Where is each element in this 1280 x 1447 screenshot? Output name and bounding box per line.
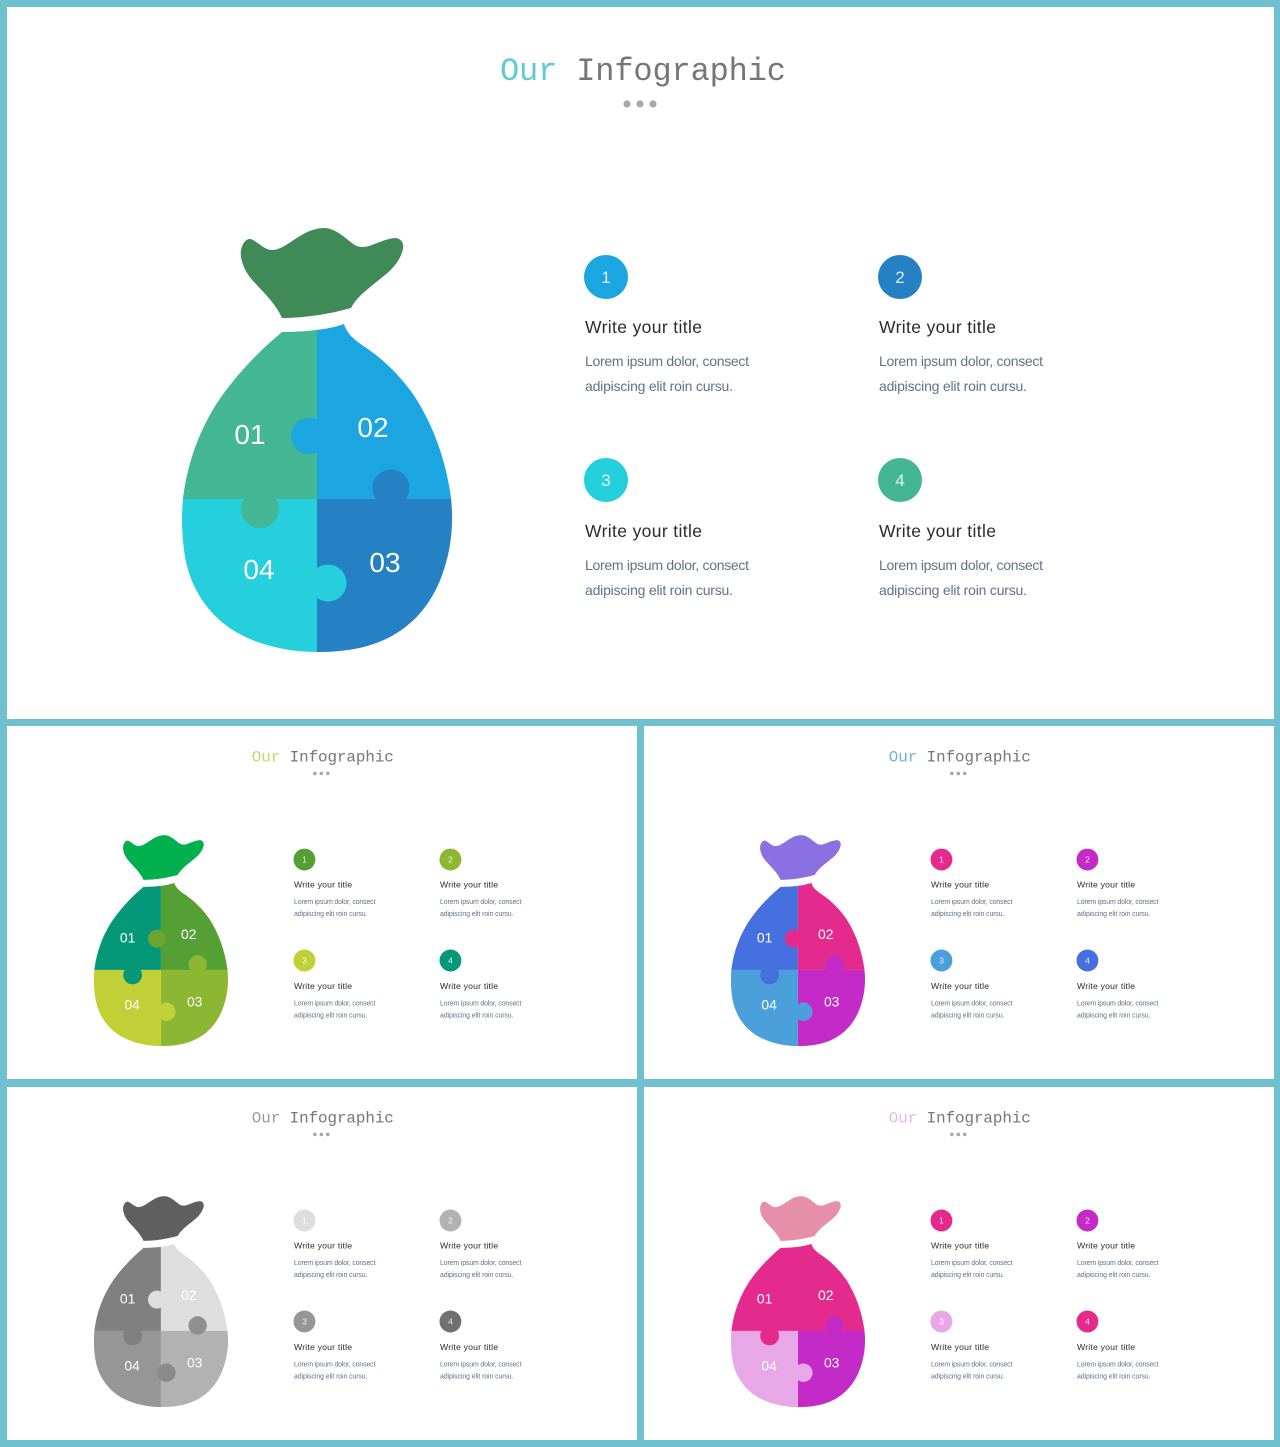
bag labels: 04 (243, 554, 275, 585)
item 2: Lorem ipsum dolor, consect (1077, 899, 1159, 906)
item 2: adipiscing elit roin cursu. (440, 911, 514, 918)
item 2: 2 (895, 268, 905, 287)
bag labels: 03 (824, 1354, 840, 1370)
item 1: Write your title (585, 317, 702, 337)
item 4: Lorem ipsum dolor, consect (440, 1361, 522, 1368)
title: Our Infographic (252, 1109, 394, 1128)
puzzle bag body (94, 883, 228, 1046)
item 1: Lorem ipsum dolor, consect (931, 1260, 1013, 1267)
item 3: Lorem ipsum dolor, consect (294, 1000, 376, 1007)
title dots (950, 772, 967, 775)
bag labels: 03 (187, 993, 203, 1009)
item 1: adipiscing elit roin cursu. (931, 911, 1005, 918)
item 3 (584, 458, 749, 598)
item 3: 3 (302, 1316, 307, 1326)
panel: purple slide (644, 726, 1274, 1079)
item 3 (931, 950, 1013, 1020)
bag labels: 02 (181, 926, 197, 942)
item 4: adipiscing elit roin cursu. (1077, 1374, 1151, 1381)
item 2: 2 (448, 1215, 453, 1225)
item 2: adipiscing elit roin cursu. (1077, 1272, 1151, 1279)
item 3: adipiscing elit roin cursu. (294, 1374, 368, 1381)
item 3: adipiscing elit roin cursu. (294, 1013, 368, 1020)
panel: main teal and blue slide (7, 7, 1274, 719)
bag labels: 03 (187, 1354, 203, 1370)
title dots (313, 1133, 330, 1136)
item 3: 3 (939, 955, 944, 965)
title: Our Infographic (500, 53, 786, 90)
item 1 (931, 1210, 1013, 1279)
item 4 (440, 950, 522, 1020)
item 4: Write your title (440, 981, 498, 991)
item 1: adipiscing elit roin cursu. (294, 1272, 368, 1279)
item 3: Write your title (931, 1342, 989, 1352)
item 3 (294, 1311, 376, 1381)
item 1: adipiscing elit roin cursu. (931, 1272, 1005, 1279)
item 4: Lorem ipsum dolor, consect (440, 1000, 522, 1007)
item 4: 4 (448, 1316, 453, 1326)
panel: green slide (7, 726, 637, 1079)
item 4: adipiscing elit roin cursu. (1077, 1013, 1151, 1020)
item 3: Lorem ipsum dolor, consect (585, 557, 749, 573)
item 2 (1077, 849, 1159, 918)
bag labels: 03 (369, 547, 401, 578)
bag labels: 01 (757, 930, 773, 946)
item 2: Lorem ipsum dolor, consect (1077, 1260, 1159, 1267)
item 1: Lorem ipsum dolor, consect (585, 353, 749, 369)
item 4: Lorem ipsum dolor, consect (1077, 1000, 1159, 1007)
item 4 (1077, 950, 1159, 1020)
item 4 (878, 458, 1043, 598)
item 4: Write your title (879, 521, 996, 541)
item 2 (440, 849, 522, 918)
item 1 (294, 1210, 376, 1279)
bag labels: 01 (757, 1291, 773, 1307)
item 3: 3 (939, 1316, 944, 1326)
bag labels: 03 (824, 993, 840, 1009)
item 4: Lorem ipsum dolor, consect (879, 557, 1043, 573)
bag labels: 01 (120, 930, 136, 946)
puzzle bag body (730, 883, 865, 1046)
item 1: Lorem ipsum dolor, consect (294, 899, 376, 906)
panel: gray slide (7, 1087, 637, 1440)
item 3 (931, 1311, 1013, 1381)
item 1: Lorem ipsum dolor, consect (294, 1260, 376, 1267)
item 2: 2 (448, 854, 453, 864)
item 1: 1 (939, 1215, 944, 1225)
bag labels: 02 (357, 412, 389, 443)
icon: bag tie (123, 835, 204, 880)
bag labels (757, 1287, 840, 1374)
item 2: Lorem ipsum dolor, consect (879, 353, 1043, 369)
item 1: 1 (939, 854, 944, 864)
item 1: adipiscing elit roin cursu. (585, 378, 733, 394)
icon: bag tie (241, 228, 403, 318)
item 3: adipiscing elit roin cursu. (931, 1013, 1005, 1020)
bag labels: 04 (761, 1358, 777, 1374)
title dots (623, 100, 657, 108)
item 2: adipiscing elit roin cursu. (879, 378, 1027, 394)
item 1: Write your title (931, 879, 989, 889)
bag labels: 02 (818, 1287, 834, 1303)
item 2: Write your title (1077, 1240, 1135, 1250)
title: Our Infographic (889, 748, 1031, 767)
item 3: adipiscing elit roin cursu. (931, 1374, 1005, 1381)
item 4: Write your title (440, 1342, 498, 1352)
title dots (950, 1133, 967, 1136)
item 3: Write your title (931, 981, 989, 991)
item 4: Write your title (1077, 981, 1135, 991)
bag labels (120, 1287, 203, 1374)
item 1: Write your title (294, 879, 352, 889)
item 3: Lorem ipsum dolor, consect (931, 1000, 1013, 1007)
bag labels: 04 (124, 997, 140, 1013)
item 2: Lorem ipsum dolor, consect (440, 1260, 522, 1267)
icon: bag tie (123, 1196, 204, 1241)
bag labels: 04 (124, 1358, 140, 1374)
item 2: Lorem ipsum dolor, consect (440, 899, 522, 906)
item 4: 4 (895, 471, 905, 490)
item 4: 4 (1085, 955, 1090, 965)
item 1: 1 (302, 854, 307, 864)
puzzle bag body (731, 1244, 865, 1408)
item 1: adipiscing elit roin cursu. (294, 911, 368, 918)
item 3: Write your title (294, 981, 352, 991)
item 4: Write your title (1077, 1342, 1135, 1352)
item 1 (294, 849, 376, 918)
item 2 (1077, 1210, 1159, 1279)
item 4: Lorem ipsum dolor, consect (1077, 1361, 1159, 1368)
item 1: Write your title (294, 1240, 352, 1250)
item 2: Write your title (440, 879, 498, 889)
panel: pink slide (644, 1087, 1274, 1440)
item 4: adipiscing elit roin cursu. (879, 582, 1027, 598)
item 1: Write your title (931, 1240, 989, 1250)
bag labels (757, 926, 840, 1013)
item 1: Lorem ipsum dolor, consect (931, 899, 1013, 906)
item 2 (440, 1210, 522, 1279)
item 1: 1 (302, 1215, 307, 1225)
item 4: adipiscing elit roin cursu. (440, 1013, 514, 1020)
item 4: adipiscing elit roin cursu. (440, 1374, 514, 1381)
item 3: Lorem ipsum dolor, consect (294, 1361, 376, 1368)
item 2: Write your title (440, 1240, 498, 1250)
item 4 (440, 1311, 522, 1381)
title: Our Infographic (252, 748, 394, 767)
item 2: 2 (1085, 854, 1090, 864)
item 3: Write your title (294, 1342, 352, 1352)
icon: bag tie (760, 1196, 841, 1241)
item 1: 1 (601, 268, 611, 287)
puzzle bag body (182, 324, 452, 652)
item 1 (931, 849, 1013, 918)
item 1 (584, 255, 749, 394)
bag labels: 02 (818, 926, 834, 942)
bag labels: 01 (234, 419, 266, 450)
bag labels (234, 412, 401, 585)
item 3: 3 (302, 955, 307, 965)
item 2: Write your title (879, 317, 996, 337)
item 4 (1077, 1311, 1159, 1381)
item 4: 4 (448, 955, 453, 965)
item 2 (878, 255, 1043, 394)
item 3: Write your title (585, 521, 702, 541)
item 2: Write your title (1077, 879, 1135, 889)
title dots (313, 772, 330, 775)
item 3 (294, 950, 376, 1020)
item 2: adipiscing elit roin cursu. (1077, 911, 1151, 918)
puzzle bag body (94, 1244, 228, 1407)
bag labels: 02 (181, 1287, 197, 1303)
item 3: Lorem ipsum dolor, consect (931, 1361, 1013, 1368)
item 3: adipiscing elit roin cursu. (585, 582, 733, 598)
item 2: 2 (1085, 1215, 1090, 1225)
bag labels: 04 (761, 997, 777, 1013)
bag labels (120, 926, 203, 1013)
item 2: adipiscing elit roin cursu. (440, 1272, 514, 1279)
item 4: 4 (1085, 1316, 1090, 1326)
icon: bag tie (760, 835, 841, 880)
item 3: 3 (601, 471, 611, 490)
bag labels: 01 (120, 1291, 136, 1307)
title: Our Infographic (889, 1109, 1031, 1128)
